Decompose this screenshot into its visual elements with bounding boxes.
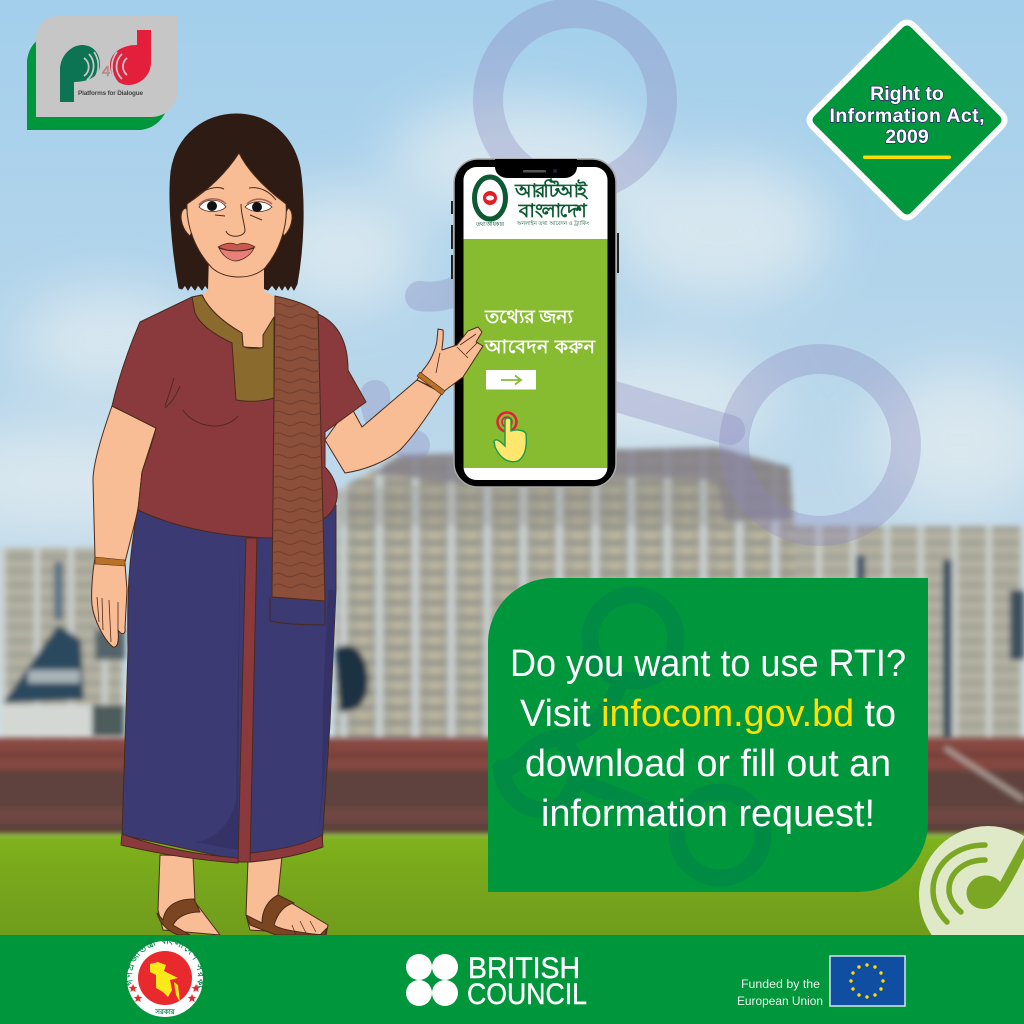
- sarong stripe: [238, 538, 257, 862]
- phone call to action: [484, 307, 596, 358]
- seal red disc: [138, 951, 192, 1005]
- seal stars: [129, 984, 200, 1002]
- mark note: [967, 838, 1024, 909]
- flag field: [830, 956, 905, 1006]
- phone: [451, 159, 619, 487]
- RTI emblem: [474, 177, 506, 228]
- phone screen: [464, 167, 608, 480]
- logo mark p4d: [60, 30, 151, 102]
- logo grey panel: [36, 16, 178, 117]
- RTI Bangladesh title: [514, 178, 590, 227]
- funded by label: [737, 979, 823, 1008]
- right hand: [417, 327, 483, 392]
- badge: Right to Information Act diamond: [810, 22, 1004, 218]
- RTI emblem: তথ্য অধিকার: [475, 221, 505, 228]
- phone camera: [553, 169, 557, 173]
- phone call to action: তথ্যের জন্য: [484, 307, 574, 328]
- EU flag: [830, 956, 905, 1006]
- sandals: [157, 895, 327, 935]
- British Council wordmark: COUNCIL: [467, 978, 587, 1011]
- logo: Bangladesh government seal: [126, 938, 204, 1017]
- badge title: [830, 83, 984, 148]
- phone notch: [495, 159, 577, 178]
- eyes: [194, 188, 276, 220]
- seal white ring: [127, 941, 203, 1017]
- scarf: [272, 296, 325, 601]
- mark arcs: [933, 845, 985, 922]
- face: [187, 153, 286, 277]
- British Council dots: [406, 954, 458, 1006]
- seal map: [150, 962, 180, 1002]
- footer band: [0, 935, 1024, 1024]
- background: grass: [0, 834, 1024, 944]
- logo mark p4d: Platforms for Dialogue: [78, 90, 143, 97]
- badge title: 2009: [885, 126, 929, 148]
- right bangle: [417, 372, 445, 395]
- background: blurred parliament building: [0, 447, 1024, 743]
- badge diamond: [810, 22, 1004, 218]
- left bangle: [95, 557, 125, 566]
- shirt: [112, 295, 366, 538]
- RTI Bangladesh title: বাংলাদেশ: [518, 201, 588, 222]
- badge yellow underline: [863, 156, 951, 159]
- callout text: Visit infocom.gov.bd to: [520, 693, 896, 735]
- ears: [181, 208, 292, 236]
- sarong shade: [195, 540, 336, 850]
- sarong pocket: [270, 597, 325, 625]
- lips: [218, 243, 255, 261]
- left hand: [92, 558, 127, 647]
- phone speaker: [523, 170, 546, 172]
- logo: British Council: [406, 952, 587, 1011]
- neck: [198, 250, 275, 350]
- logo green backing: [27, 33, 168, 130]
- sarong hem: [121, 834, 323, 863]
- callout background: [488, 578, 928, 892]
- right arm: [325, 380, 442, 473]
- legs: [158, 855, 328, 935]
- seal bottom label: সরকার: [154, 1008, 176, 1016]
- phone arrow button: [486, 370, 536, 390]
- scarf wave pattern: [272, 300, 326, 590]
- tap hand icon: [494, 412, 526, 462]
- funded by label: Funded by the: [741, 979, 820, 991]
- sarong: [122, 505, 336, 860]
- flag stars: [849, 963, 885, 999]
- left arm: [93, 406, 156, 562]
- phone side buttons: [451, 201, 619, 279]
- phone green panel: [464, 239, 608, 468]
- callout text: [510, 643, 906, 835]
- shirt collar: [192, 295, 274, 401]
- logo mark p4d: 4: [102, 63, 110, 80]
- callout text: Do you want to use RTI?: [510, 643, 906, 685]
- RTI Bangladesh title: আরটিআই: [514, 178, 589, 202]
- left hand finger lines: [97, 597, 118, 642]
- shirt crease lines: [165, 378, 238, 426]
- badge title: Right to: [870, 83, 944, 105]
- pale corner mark: [919, 826, 1024, 935]
- toes: [292, 921, 316, 935]
- callout text: download or fill out an: [525, 743, 891, 785]
- seal ring text: গণপ্রজাতন্ত্রী বাংলাদেশ সরকার: [126, 938, 204, 988]
- RTI Bangladesh title: অনলাইন তথ্য আবেদন ও ট্র্যাকিং: [516, 219, 590, 227]
- nose: [226, 204, 245, 236]
- British Council wordmark: BRITISH: [468, 952, 580, 985]
- funded by label: European Union: [737, 996, 823, 1008]
- character: woman in sarong: [92, 114, 483, 935]
- background: brick terrace: [0, 738, 1024, 836]
- callout panel: [488, 578, 928, 892]
- mark disc: [919, 826, 1024, 935]
- callout text: information request!: [541, 793, 875, 835]
- hair: [170, 114, 303, 290]
- watermark: purple share icon: [375, 13, 906, 531]
- callout watermark icon: [501, 595, 763, 878]
- badge title: Information Act,: [830, 105, 984, 127]
- phone body: [454, 159, 616, 487]
- British Council wordmark: [467, 952, 587, 1011]
- logo: Platforms for Dialogue: [27, 16, 178, 130]
- right hand finger lines: [436, 334, 478, 373]
- phone call to action: আবেদন করুন: [484, 337, 596, 358]
